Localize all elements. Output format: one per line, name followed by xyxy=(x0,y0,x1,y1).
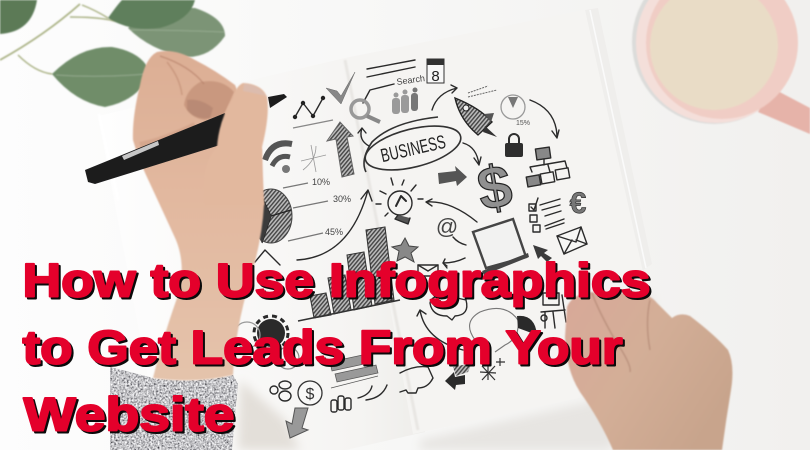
icon: line graph xyxy=(293,96,325,119)
headline shadow: to Get Leads From Your xyxy=(24,322,624,376)
icon: speech bubbles xyxy=(270,381,291,401)
icon: padlock xyxy=(505,134,523,157)
headline text: to Get Leads From Your xyxy=(22,320,622,374)
handle xyxy=(758,88,810,134)
business bubble xyxy=(361,117,465,178)
sketch cross graph xyxy=(301,145,326,172)
cup xyxy=(646,0,798,119)
arrow to dollar xyxy=(463,143,481,165)
headline shadow: Website xyxy=(26,390,236,442)
icon: org chart xyxy=(526,147,570,187)
star xyxy=(392,238,418,262)
coffee xyxy=(650,0,778,110)
sweater sleeve xyxy=(110,367,238,450)
business label: BUSINESS xyxy=(379,132,448,167)
icon: dollar circle: $ xyxy=(306,386,315,403)
icon: gears xyxy=(234,316,299,369)
left page edge highlight xyxy=(99,114,118,200)
icon: block arrow xyxy=(438,166,467,186)
thumbnail xyxy=(243,84,266,96)
arrow to rocket xyxy=(432,85,457,110)
thought circle xyxy=(470,308,518,352)
icon: light bulb xyxy=(376,178,423,224)
dark half circle xyxy=(517,316,537,335)
gray bars xyxy=(330,354,378,388)
icon: pen xyxy=(85,94,287,184)
speech bubble lower xyxy=(430,296,467,320)
leaves and stem xyxy=(0,0,225,107)
icon: down arrow xyxy=(286,408,308,438)
notebook page stack edge xyxy=(585,8,652,272)
small rocket note xyxy=(468,86,497,97)
icon: magnifier xyxy=(351,84,394,122)
icon: crowd xyxy=(331,396,351,412)
headline shadow xyxy=(24,256,652,442)
leaf: top middle xyxy=(108,0,195,29)
icon: rocket xyxy=(455,98,497,137)
spine shadow xyxy=(345,60,418,430)
icon: dollar sign: $ xyxy=(472,152,517,223)
icon: envelope xyxy=(557,227,587,254)
percent labels xyxy=(283,177,351,241)
notebook xyxy=(98,8,652,450)
icon: up arrow xyxy=(327,122,354,177)
left arm and hand xyxy=(133,51,264,380)
leaf: lower xyxy=(52,47,150,107)
percent labels: 30% xyxy=(333,194,351,204)
icon: gauge: 15% xyxy=(516,120,530,127)
icon: people xyxy=(392,88,418,114)
soft shadow under notebook xyxy=(420,290,660,450)
thumb over pen xyxy=(204,83,268,205)
icon: laptop xyxy=(473,219,529,275)
envelope small xyxy=(418,265,438,276)
icon: dollar circle xyxy=(298,381,322,405)
leaf: back xyxy=(128,8,225,57)
euro sign: € xyxy=(570,187,587,220)
coffee cup on saucer xyxy=(632,0,810,134)
bar chart xyxy=(298,227,400,321)
icon: sparkle marks xyxy=(480,358,505,380)
icon: gauge xyxy=(501,95,530,127)
palm and arm xyxy=(133,51,264,380)
saucer xyxy=(632,0,796,124)
headline text xyxy=(22,254,650,440)
right page xyxy=(345,10,643,434)
left page xyxy=(98,58,425,450)
headline xyxy=(22,254,652,442)
small curved arrows xyxy=(358,385,387,400)
headline text: How to Use Infographics xyxy=(22,254,650,306)
headline shadow: How to Use Infographics xyxy=(24,256,652,308)
icon: down-left block arrow xyxy=(445,363,472,390)
search lines xyxy=(367,60,415,77)
icon: calendar xyxy=(427,59,444,85)
icon: check mark xyxy=(326,72,355,104)
headline text: Website xyxy=(24,388,234,440)
at sign: @ xyxy=(436,214,458,239)
right hand xyxy=(565,292,732,450)
leaf: top left xyxy=(0,0,37,34)
percent labels: 45% xyxy=(325,227,343,237)
house sketch xyxy=(255,250,280,265)
search label: Search xyxy=(396,73,426,87)
growth arrow xyxy=(297,190,372,260)
icon: pie chart xyxy=(250,189,292,243)
finger folds xyxy=(184,81,234,120)
arrow from bubble to check xyxy=(358,128,369,146)
hand-drawn business doodles xyxy=(234,59,587,438)
small arrows xyxy=(443,237,466,266)
icon: piggy bank xyxy=(400,367,433,393)
page shadow near sleeve xyxy=(238,380,300,450)
icon: checklist xyxy=(529,198,564,232)
icon: wifi xyxy=(265,143,292,173)
icon: cursor xyxy=(533,245,552,262)
arrow to lock xyxy=(530,100,559,138)
icon: tools xyxy=(541,293,566,328)
icon: calendar: 8 xyxy=(431,68,440,85)
percent labels: 10% xyxy=(312,177,330,187)
arrow to bulb xyxy=(426,199,477,222)
curved arrow lower xyxy=(417,310,463,350)
